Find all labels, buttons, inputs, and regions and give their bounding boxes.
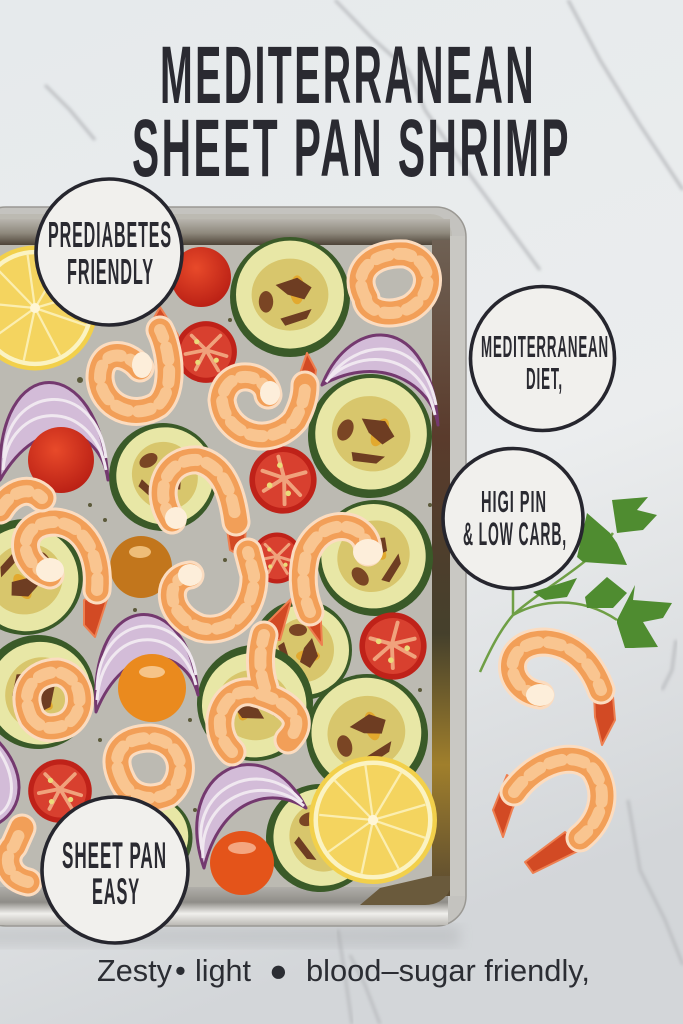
badge: high protein low carb: HIGI PIN: [481, 484, 547, 519]
badge: high protein low carb: [443, 448, 583, 588]
badge: sheet pan easy: EASY: [92, 871, 140, 912]
tagline: blood–sugar friendly,: [306, 953, 590, 988]
badge: sheet pan easy: [42, 797, 188, 943]
tomatoes: [28, 247, 439, 895]
tagline: [97, 953, 590, 988]
tagline: •: [175, 953, 186, 988]
tagline: Zesty: [97, 953, 172, 988]
shrimp on pan: [0, 254, 428, 882]
badge: prediabetes friendly: [36, 179, 182, 325]
pan specks: [77, 318, 432, 812]
lemon slices: [0, 246, 437, 884]
parsley sprig: [480, 497, 672, 672]
text: PREDIABETES: [48, 214, 172, 255]
title: [132, 30, 571, 194]
zucchini slices: [0, 237, 457, 907]
badge: prediabetes friendly: FRIENDLY: [67, 251, 154, 292]
red onion wedges: [0, 335, 438, 868]
tagline: light: [195, 953, 251, 988]
tagline: ●: [269, 953, 288, 988]
sheet pan: [0, 207, 466, 926]
shrimp beside pan, lower: [493, 759, 602, 873]
badge: sheet pan easy: SHEET PAN: [62, 835, 167, 876]
shrimp beside pan, upper: [512, 642, 615, 745]
badge: mediterranean diet: [470, 286, 614, 430]
badge: mediterranean diet: DIET,: [526, 361, 563, 396]
